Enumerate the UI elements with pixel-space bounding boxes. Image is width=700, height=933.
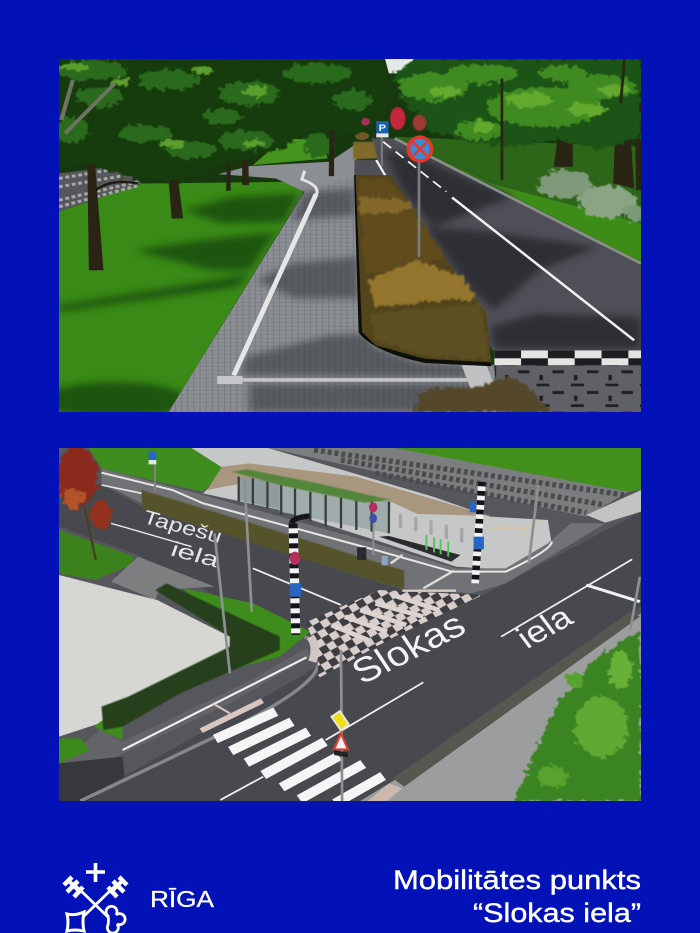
zebra crossing — [215, 712, 383, 803]
dark corner and grass bottom left — [59, 738, 125, 801]
road surface — [59, 483, 641, 801]
bicycle parking markings — [492, 522, 542, 535]
panel: street view with cycle path and planted median — [59, 59, 641, 412]
street name marking: Slokas iela — [344, 598, 580, 691]
light pavement plaza — [192, 448, 552, 570]
checkered raised crossing edge — [494, 350, 641, 365]
title: Mobilitātes punkts Slokas iela: Mobilitātes punkts — [393, 865, 641, 895]
small utility box — [357, 547, 366, 560]
street name marking: Tapešu iela — [140, 507, 225, 572]
street name marking: Tapešu iela: iela — [168, 537, 223, 572]
parking sign top left — [149, 451, 156, 492]
railway tracks — [268, 448, 628, 517]
stone paving corner — [111, 557, 215, 600]
grass top left — [88, 448, 226, 492]
grass corner left — [59, 530, 134, 580]
bus and bike shelter with green roof — [232, 469, 391, 533]
pavement along hedge — [59, 648, 310, 770]
railway tracks — [59, 165, 142, 212]
right lawn — [395, 137, 641, 265]
street name marking: Slokas iela: iela — [509, 598, 580, 655]
autumn red tree — [56, 447, 113, 560]
road markings — [111, 523, 640, 800]
shelter signs — [369, 502, 388, 565]
red tree in the distance — [390, 107, 426, 131]
distant no parking sign — [361, 118, 370, 126]
curb of side street — [80, 637, 320, 801]
electric scooters bay — [379, 535, 461, 562]
logo: Riga crossed keys emblem — [62, 863, 128, 933]
no stopping sign — [407, 135, 433, 257]
signal pole left — [290, 516, 310, 635]
title: Mobilitātes punkts Slokas iela: “Slokas iela” — [473, 898, 641, 928]
left lawn with tree shadows — [42, 182, 303, 419]
sky gap — [385, 59, 414, 73]
cycle lane marking — [217, 171, 496, 390]
sidewalk bottom right — [360, 612, 641, 801]
tree canopy left — [57, 59, 387, 183]
low grass tuft foreground — [414, 375, 552, 412]
raised checkered crossing — [306, 590, 483, 678]
street name marking: Slokas iela: Slokas — [344, 604, 473, 691]
lamp posts — [215, 480, 640, 801]
title: Mobilitātes punkts Slokas iela — [393, 865, 641, 928]
cycle path strip — [102, 468, 605, 593]
trimmed hedge — [102, 583, 280, 730]
paved cycle and foot path — [169, 145, 498, 412]
panel: aerial view of Slokas and Tapešu street junction — [59, 448, 641, 801]
street name marking: Tapešu iela: Tapešu — [140, 507, 225, 548]
patterned paving — [496, 365, 641, 412]
ornamental grass median — [353, 132, 491, 364]
cross — [86, 863, 105, 882]
lawn in the distance — [253, 138, 328, 165]
bicycle racks — [400, 515, 462, 541]
key from top right to square bow — [67, 877, 127, 931]
empty light plot — [59, 575, 230, 737]
crossing warning signs — [331, 711, 349, 757]
logo wordmark: RĪGA — [150, 886, 214, 912]
tree canopy right — [393, 59, 641, 150]
asphalt road — [354, 138, 641, 350]
parking sign: P — [379, 124, 386, 134]
flowering shrubs — [538, 170, 644, 222]
right trunks over foliage — [502, 59, 625, 180]
gravel mound behind shelter — [207, 463, 490, 516]
grass strip top right — [395, 448, 641, 493]
parking sign — [376, 121, 389, 167]
signal pole right — [470, 482, 484, 583]
grass behind hedge — [184, 588, 310, 670]
key from top left to clover bow — [64, 877, 125, 933]
concrete slab at tracks — [586, 490, 641, 523]
green tree foreground — [515, 630, 641, 801]
roadside planting strip — [142, 490, 404, 589]
tree trunks — [61, 60, 641, 270]
